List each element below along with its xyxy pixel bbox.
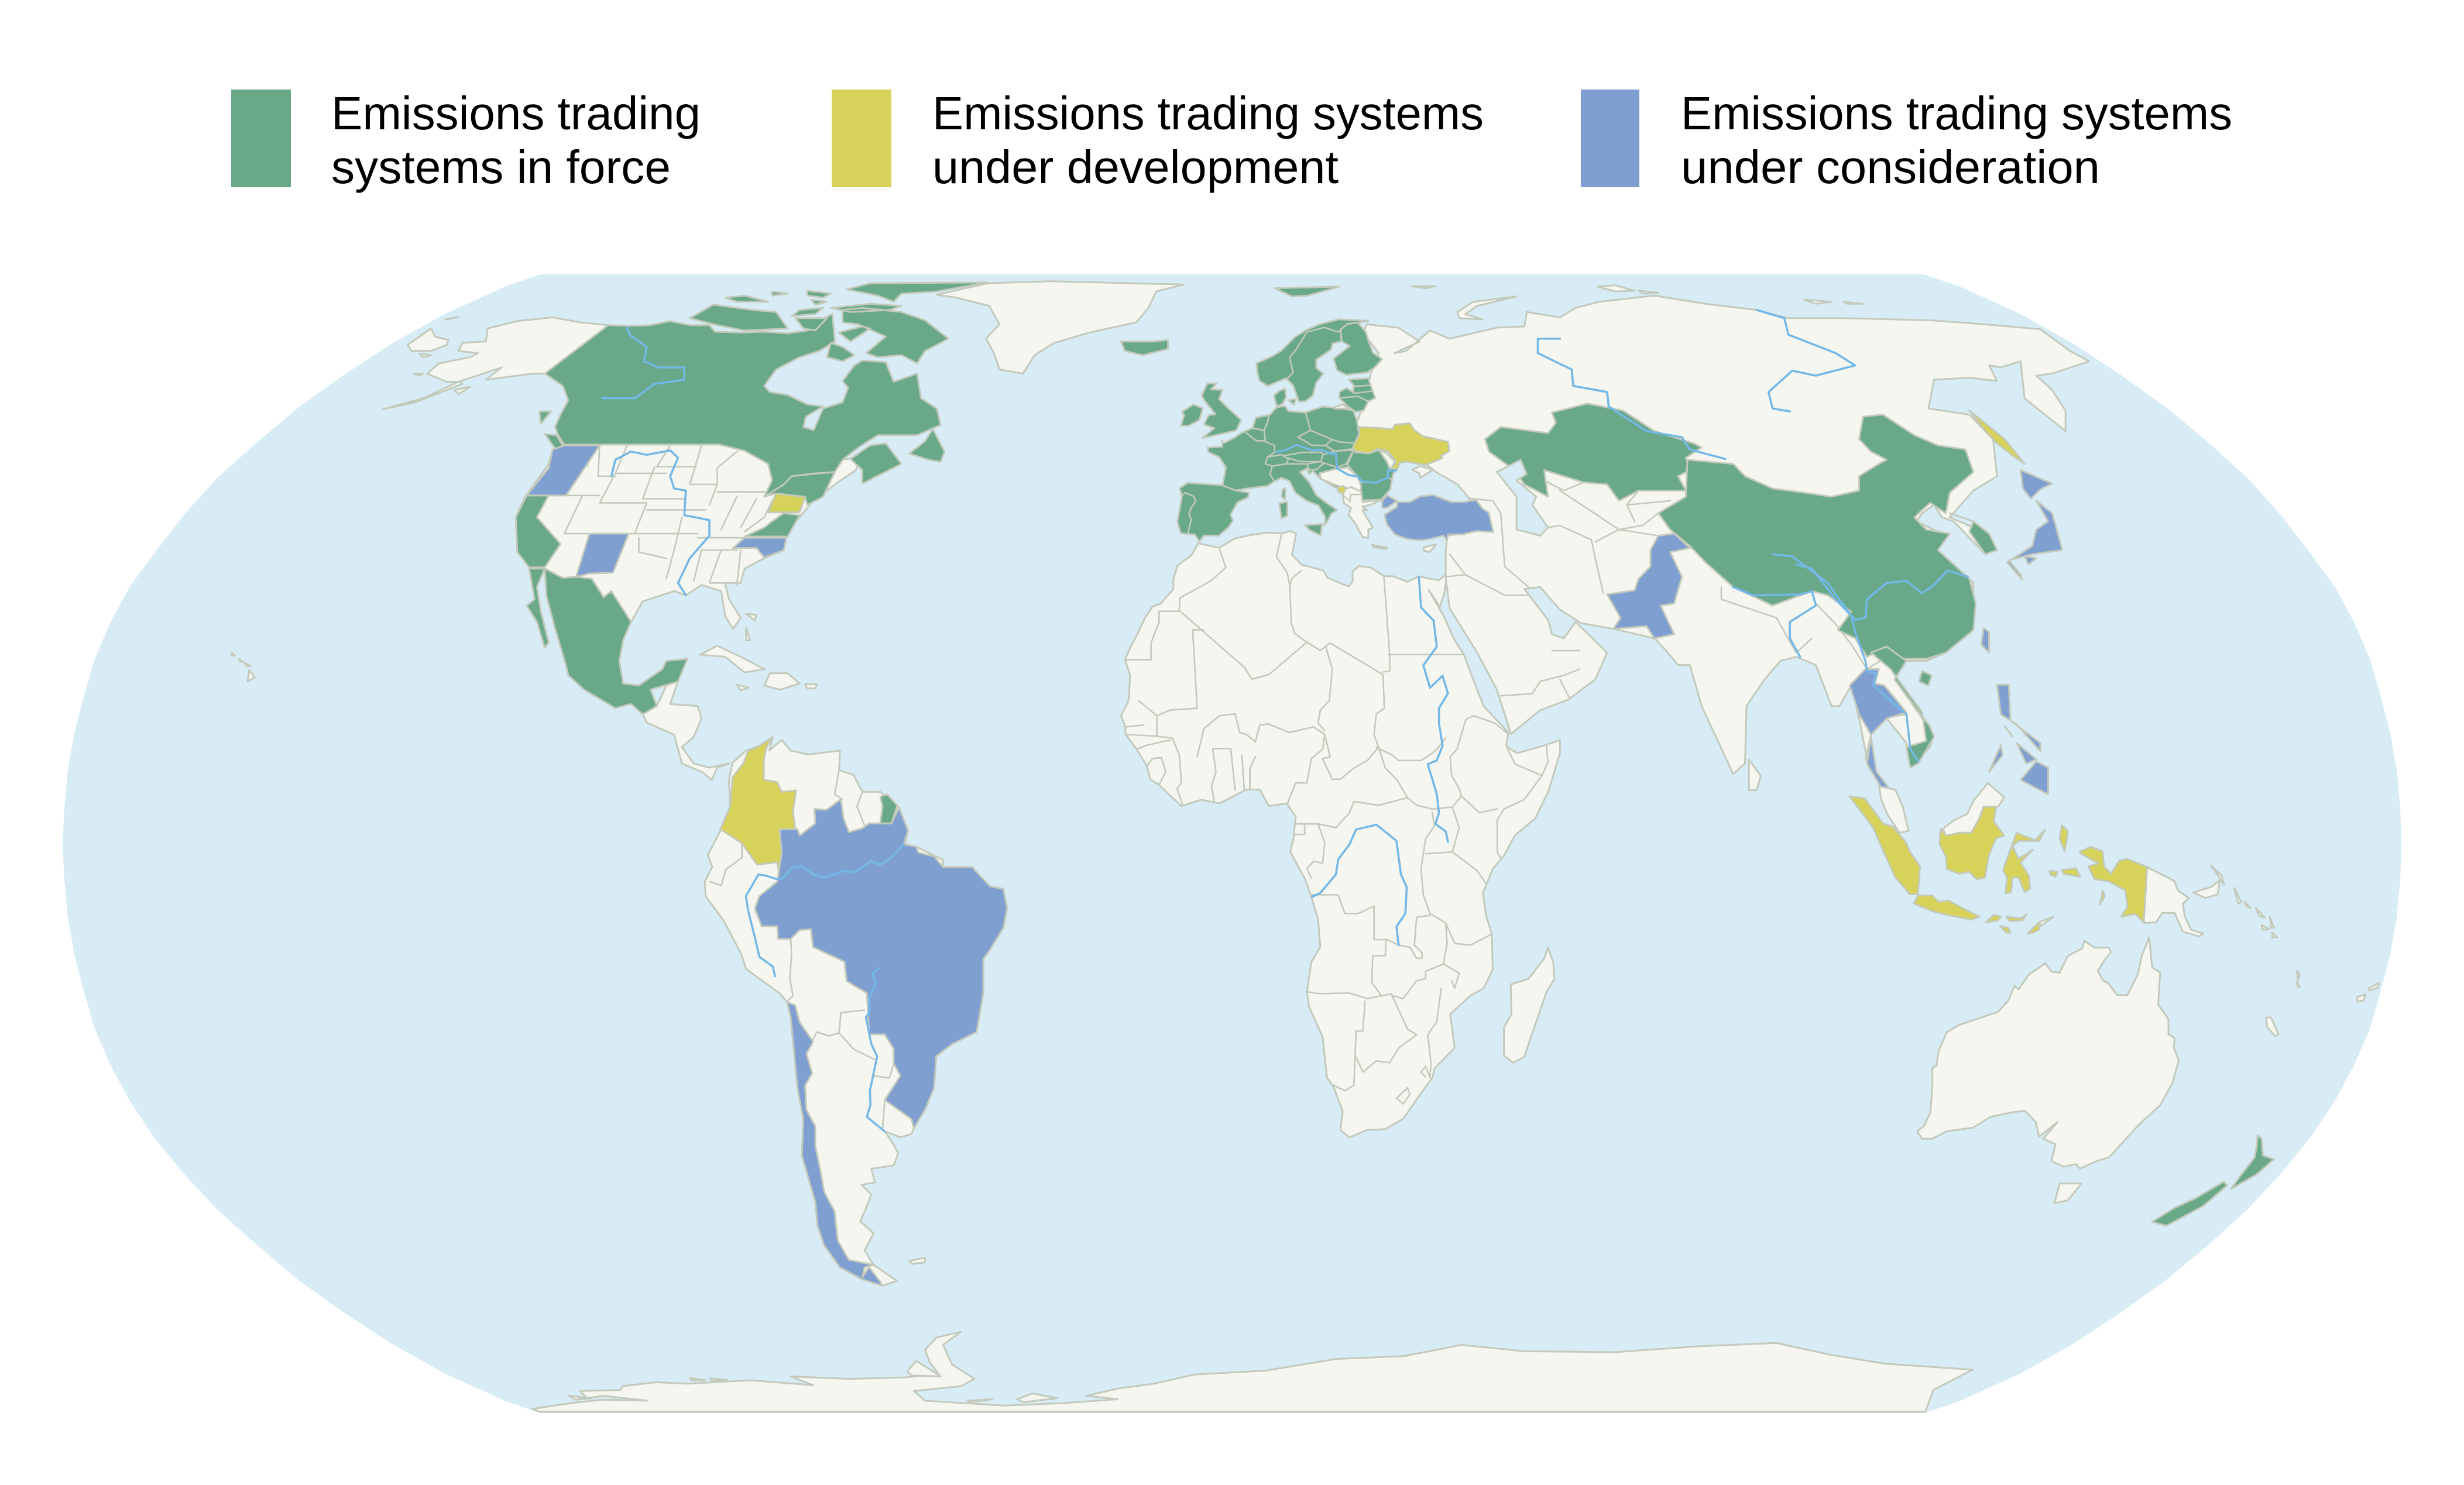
legend item: under consideration [1581,87,2232,193]
Chile [787,1002,883,1285]
West Papua [2080,847,2147,922]
North Macedonia border [1344,494,1361,502]
Eurasia [1275,286,2089,795]
Turkey [1382,495,1493,540]
Greece and southern Balkans [1343,487,1381,538]
Canada [545,314,941,497]
Central America [643,682,729,780]
Finland [1334,323,1382,375]
Baltic borders [1339,385,1373,401]
Eurasia landmass [1355,295,2089,795]
Alaska [383,317,608,410]
Mediterranean islands [1279,488,1322,535]
Norway Sweden border [1287,328,1340,379]
legend item: in force: Emissions trading [331,87,701,139]
legend item: in force [231,87,701,193]
Tasmania [2054,1184,2081,1204]
legend item: under development: Emissions trading systems [932,87,1484,139]
Vietnam [1871,647,1934,768]
river: Danube [1277,445,1396,483]
California [516,496,561,568]
rivers of North America [602,328,709,595]
South America landmass [705,737,1007,1285]
Brazil [755,799,1007,1128]
New York and New England [764,472,835,505]
legend item: in force: systems in force [331,141,671,193]
Sri Lanka [1749,759,1761,790]
Baltic states [1339,379,1375,412]
Madagascar [1504,948,1554,1063]
contiguous United States [516,445,860,629]
Kaliningrad [1335,404,1348,409]
Thailand [1849,669,1906,792]
Sumatra [1849,796,1920,894]
legend item: under consideration: under consideration [1681,141,2100,193]
Denmark [1274,389,1295,406]
Arctic islands [1412,286,1863,319]
northern Borneo [1940,783,2004,837]
legend item: under development: under development [932,141,1339,193]
Antarctica [532,1332,1973,1412]
Svalbard [1275,287,1339,297]
Greenland [936,281,1183,374]
South Korea [1969,521,1997,554]
Canadian islands [539,283,988,484]
Scandinavia [1257,319,1368,401]
Great Britain and Ireland [1181,383,1241,438]
Virginia and Maryland [744,513,799,537]
Java [1914,895,1979,920]
Australia [1917,937,2179,1168]
central and southern Europe [1207,406,1397,525]
Portugal border [1182,493,1196,533]
Caspian Sea [1497,460,1548,536]
North Carolina [733,538,786,558]
Montenegro [1338,486,1346,494]
Colombia [720,737,796,876]
US state borders [527,445,772,585]
Europe and Turkey [1178,319,1493,552]
China [1658,415,1976,659]
legend [231,87,2232,193]
Kazakhstan [1485,404,1701,501]
western Balkans [1320,468,1361,493]
North America [231,281,1183,780]
Falkland Islands [910,1257,925,1264]
Kalimantan [1940,807,2004,879]
Antarctic islands [569,1361,1057,1402]
Sulawesi [2003,830,2046,893]
Moldova [1379,449,1395,470]
Caribbean and Hawaii islands [231,614,817,690]
river: Nile [1419,576,1448,842]
Mexico [527,569,688,714]
Washington and Oregon [527,445,600,496]
African country borders [1125,534,1548,1104]
French Guiana [880,795,897,823]
Hainan [1919,671,1931,686]
Africa and Madagascar [1121,531,1560,1137]
Ukraine [1353,424,1449,470]
Iceland [1121,340,1168,355]
New Zealand [2152,1135,2274,1226]
Iberia [1178,483,1249,541]
Papua New Guinea and Pacific islands [2039,865,2379,1036]
South American borders [710,770,894,1129]
Sakhalin [1969,411,2024,464]
European country borders [1244,413,1392,482]
rivers of South America [746,844,904,1132]
Malay Peninsula [1879,786,1909,833]
river: Congo [1312,824,1407,945]
Oceania and Indonesia [1849,783,2379,1226]
South America and Antarctica [532,737,1973,1412]
Crete and Cyprus [1372,544,1436,552]
New Mexico [576,534,629,577]
Africa landmass [1121,531,1560,1137]
legend item: under development [832,87,1484,193]
Taiwan [1981,628,1989,653]
Japan [2007,470,2063,580]
Philippines [1989,685,2048,795]
Maluku and Lesser Sunda islands [1986,825,2105,933]
legend item: under consideration: Emissions trading systems [1681,87,2232,139]
ocean [63,274,2401,1413]
rivers of Asia [1538,310,1968,761]
Pakistan [1607,534,1690,638]
Pennsylvania [768,493,805,513]
world map [63,274,2401,1413]
Asian country borders [1446,480,1974,719]
Crimea [1412,466,1433,478]
